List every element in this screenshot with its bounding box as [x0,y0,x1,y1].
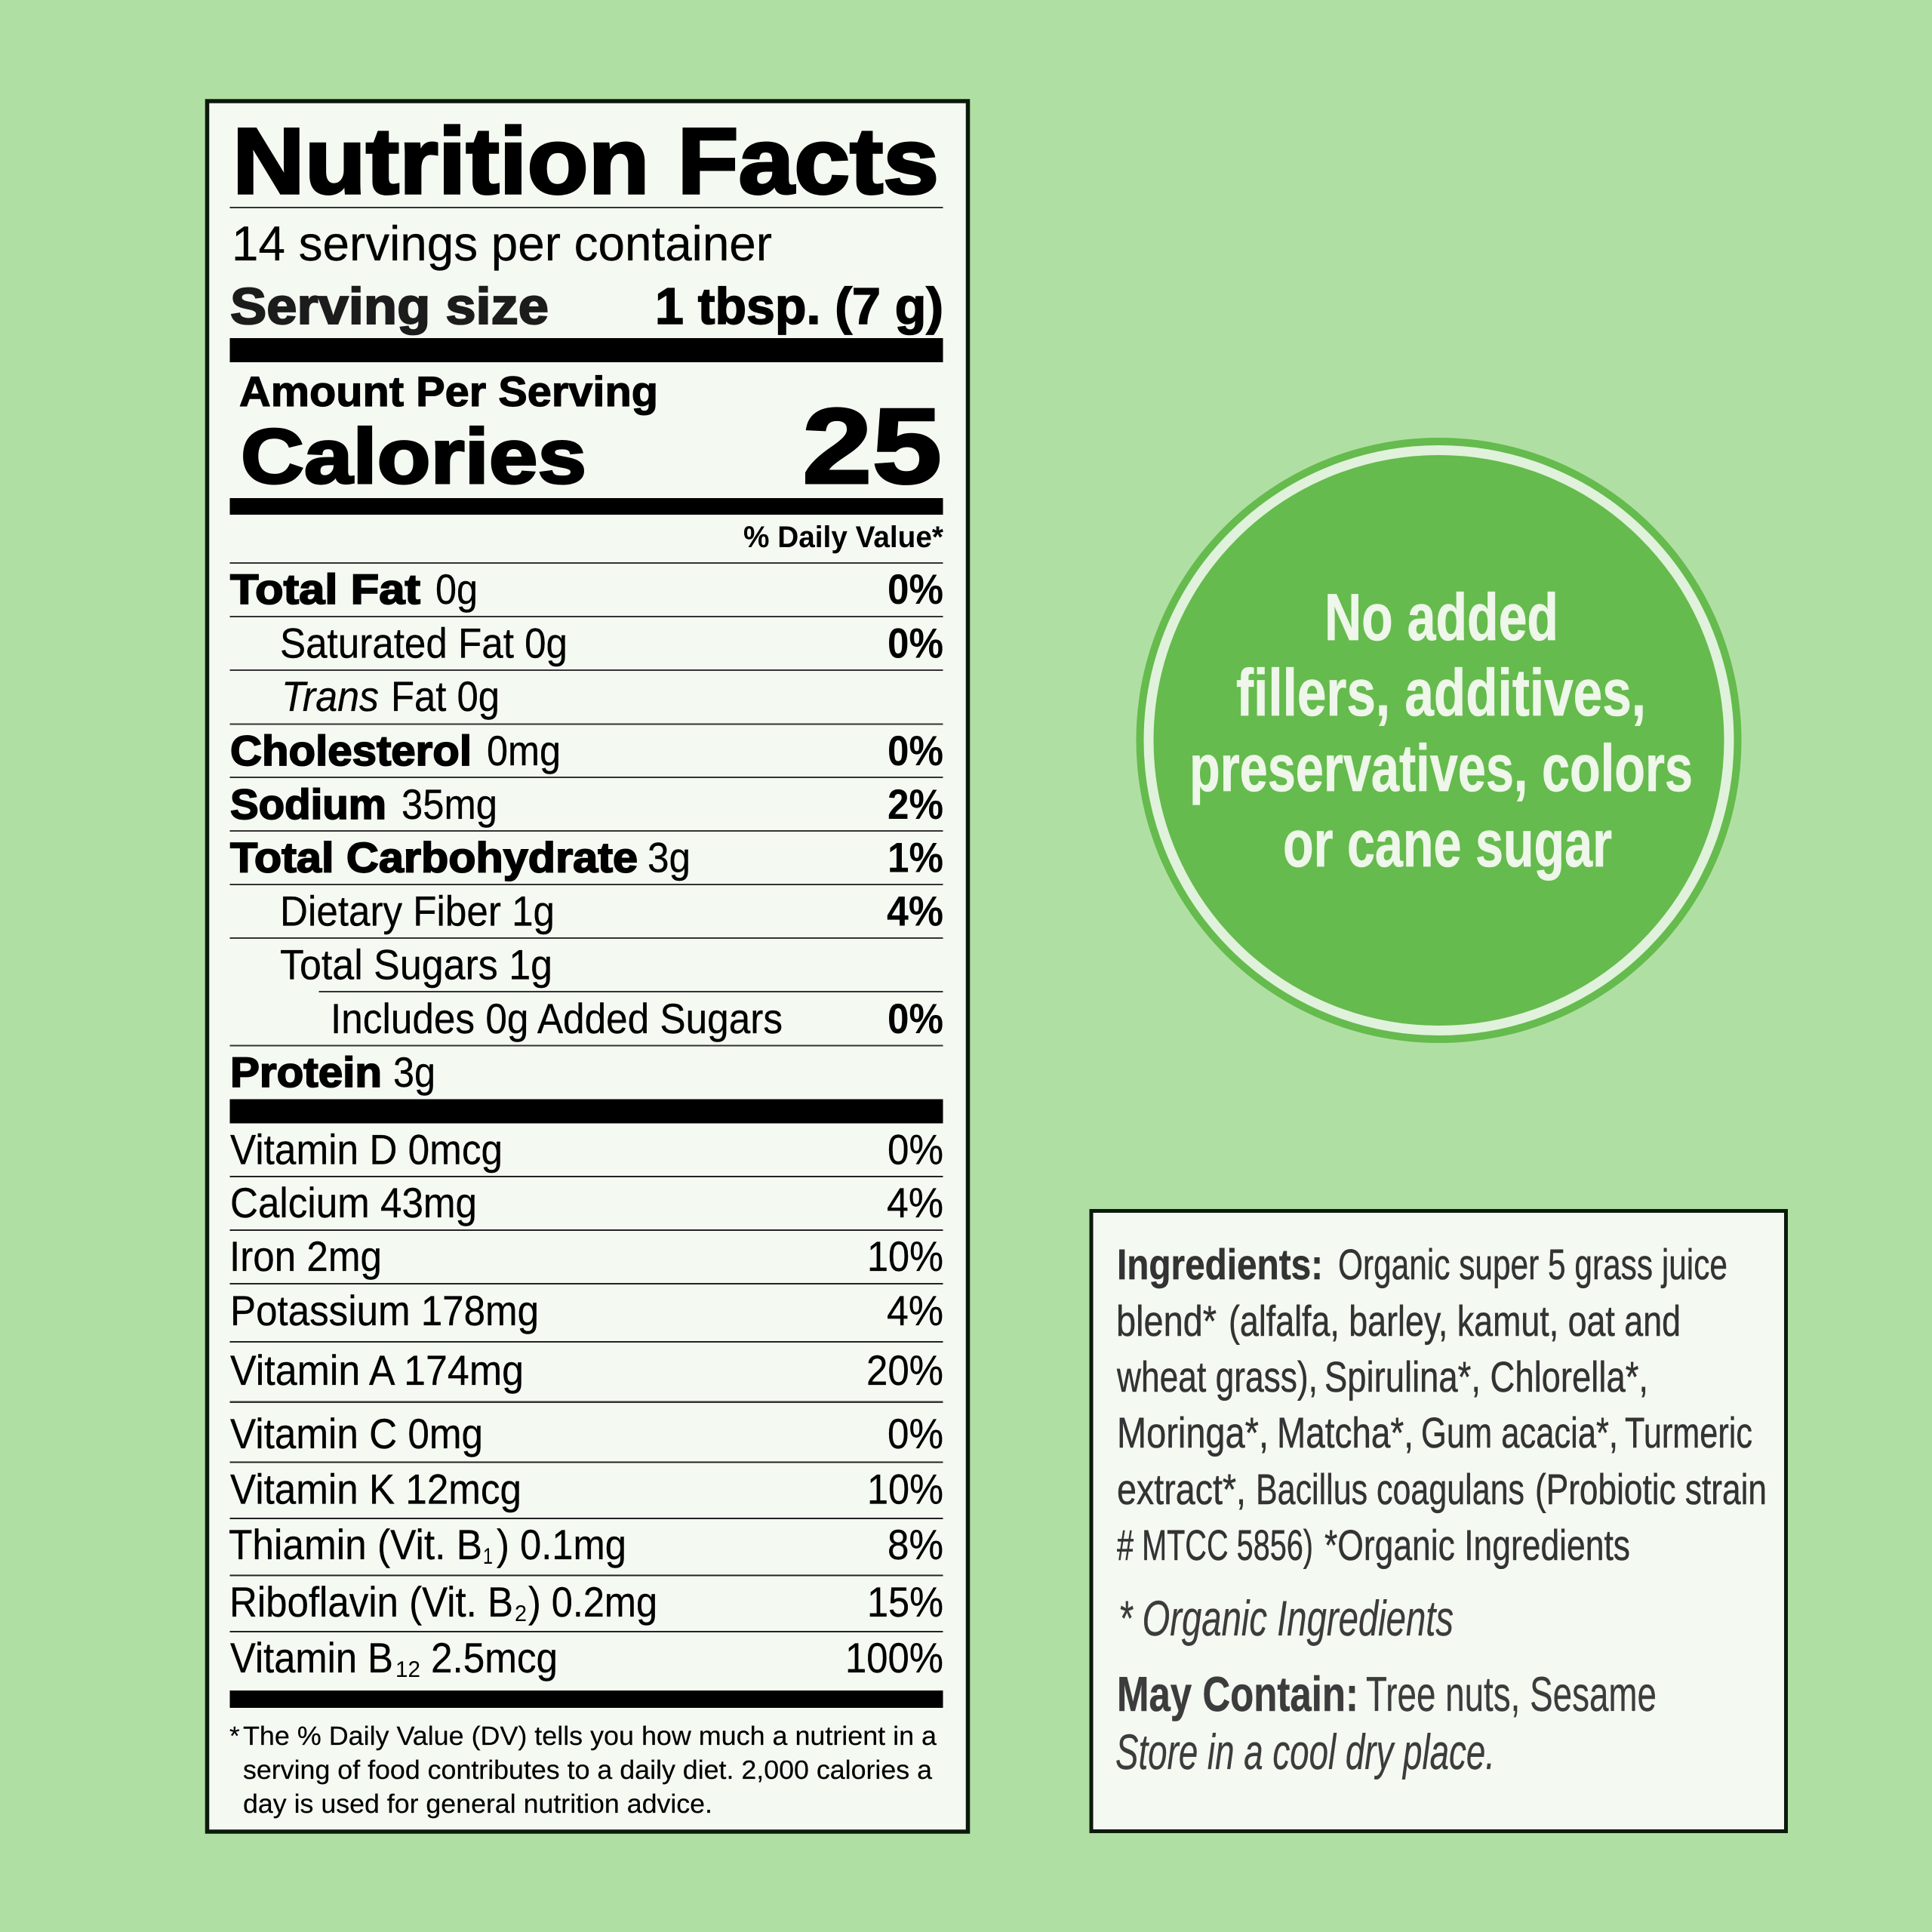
amount per serving: Amount Per Serving [239,368,658,415]
row: cholesterol [230,727,943,774]
panel: nutrition facts [207,101,968,1832]
badge: no added fillers [1137,438,1742,1043]
ingredients text: *Organic Ingredients [1324,1521,1630,1570]
row: iron: 10% [867,1232,943,1280]
row: riboflavin: ) 0.2mg [528,1578,657,1626]
footnote: * [229,1721,240,1751]
badge text: No added [1324,580,1558,654]
row: trans fat: Fat 0g [391,672,500,720]
row: calcium: 4% [887,1179,943,1226]
thick bar [229,1099,943,1123]
row: vitamin k: 10% [867,1466,943,1512]
row: trans fat: Trans [281,672,379,720]
allergens [1117,1666,1657,1721]
row: vitamin c [230,1410,943,1457]
ingredients text: Moringa*, [1117,1409,1269,1457]
badge text: or cane sugar [1283,806,1612,881]
row: total carbohydrate: 3g [648,833,691,881]
row: saturated fat: Saturated Fat 0g [280,619,568,667]
row: thiamin: ) 0.1mg [497,1521,626,1568]
row: riboflavin: 15% [867,1578,943,1626]
row: vitamin d: Vitamin D 0mcg [230,1126,503,1173]
ingredients text: # MTCC 5856) [1117,1521,1313,1570]
row: dietary fiber [280,888,943,934]
row: potassium: Potassium 178mg [230,1287,539,1334]
row: saturated fat [280,619,943,667]
allergens: May Contain: [1117,1666,1358,1721]
ingredients text: (alfalfa, barley, kamut, oat and [1229,1297,1681,1346]
row: sodium: 2% [888,780,943,828]
serving size value: 1 tbsp. (7 g) [655,278,943,335]
badge text: preservatives, colors [1189,731,1693,805]
serving size label: Serving size [230,278,549,335]
row: vitamin c: 0% [888,1410,943,1457]
panel: ingredients [1091,1211,1786,1831]
organic note: * Organic Ingredients [1118,1590,1454,1646]
footnote: day is used for general nutrition advice. [243,1789,712,1819]
row: vitamin a [230,1346,943,1394]
ingredients text: Gum acacia*, [1421,1409,1618,1457]
row: sodium [230,780,943,828]
row: protein: Protein [230,1048,382,1096]
row: total carbohydrate: Total Carbohydrate [230,833,638,881]
ingredients text: Matcha*, [1277,1409,1414,1457]
row: iron [229,1232,943,1280]
footnote: The % Daily Value (DV) tells you how much a nutrient in a [243,1721,937,1751]
row: added sugars: 0% [888,995,943,1042]
row: total fat [230,565,943,613]
allergens: Tree nuts, Sesame [1366,1666,1657,1721]
row: total carbohydrate [230,833,943,881]
row: total fat: Total Fat [230,565,420,613]
row: riboflavin: Riboflavin (Vit. B [229,1578,513,1626]
row: vitamin a: 20% [866,1346,943,1394]
footnote [229,1721,937,1819]
thick bar [229,1690,943,1708]
panel frame [207,101,968,1832]
row: vitamin a: Vitamin A 174mg [230,1346,524,1394]
ingredients text [1116,1241,1767,1570]
row: vitamin k [230,1466,943,1512]
ingredients text: Organic super 5 grass juice [1338,1241,1727,1289]
calories value: 25 [802,386,942,506]
row: riboflavin: 2 [515,1601,527,1626]
row: protein: 3g [393,1048,435,1096]
row: potassium: 4% [887,1287,943,1334]
ingredients text: (Probiotic strain [1535,1466,1767,1514]
calories label: Calories [241,413,586,500]
row: vitamin b12 [230,1634,943,1682]
servings per container: 14 servings per container [232,216,772,271]
thick bar [229,498,943,515]
row: vitamin b12: 100% [845,1634,943,1681]
row: potassium [230,1287,943,1334]
thick bar [229,338,943,362]
row: vitamin b12: 2.5mcg [431,1634,558,1681]
ingredients text: wheat grass), [1116,1353,1318,1401]
daily value header: % Daily Value* [743,521,943,554]
storage note: Store in a cool dry place. [1115,1724,1495,1780]
ingredients text: extract*, [1117,1466,1246,1514]
row: cholesterol: 0% [888,727,943,774]
row: saturated fat: 0% [888,619,943,667]
row: total sugars: Total Sugars 1g [280,940,552,989]
footnote: serving of food contributes to a daily diet. 2,000 calories a [243,1755,933,1785]
row: total fat: 0g [435,565,478,613]
row: vitamin b12: Vitamin B [230,1634,393,1681]
row: cholesterol: Cholesterol [230,727,472,774]
row: total fat: 0% [888,565,943,613]
row: added sugars: Includes 0g Added Sugars [331,995,783,1042]
ingredients text: Spirulina*, Chlorella*, [1324,1353,1648,1401]
row: vitamin d [230,1126,943,1173]
row: vitamin b12: 12 [395,1657,420,1682]
badge text: fillers, additives, [1236,655,1646,730]
row: vitamin k: Vitamin K 12mcg [230,1466,521,1512]
title: Nutrition Facts [232,109,939,214]
row: iron: Iron 2mg [229,1232,382,1280]
row: total carbohydrate: 1% [888,833,943,881]
row: vitamin d: 0% [888,1126,943,1173]
row: cholesterol: 0mg [487,727,561,774]
row: sodium: 35mg [401,780,497,828]
ingredients text: Bacillus coagulans [1256,1466,1524,1514]
ingredients text: Ingredients: [1117,1241,1323,1289]
ingredients text: blend* [1116,1297,1217,1346]
row: thiamin: Thiamin (Vit. B [229,1521,482,1568]
row: calcium [230,1179,943,1226]
row: sodium: Sodium [230,780,386,828]
row: riboflavin [229,1578,943,1626]
badge ring [1149,450,1729,1031]
row: thiamin: 1 [483,1544,493,1569]
badge outer circle [1137,438,1742,1043]
row: thiamin: 8% [888,1521,943,1568]
row: trans fat [281,672,500,720]
row: dietary fiber: Dietary Fiber 1g [280,888,555,934]
badge text [1189,580,1693,881]
panel frame [1091,1211,1786,1831]
row: thiamin [229,1521,943,1569]
row: vitamin c: Vitamin C 0mg [230,1410,483,1457]
ingredients text: Turmeric [1625,1409,1752,1457]
row: calcium: Calcium 43mg [230,1179,477,1226]
row: dietary fiber: 4% [887,888,943,934]
